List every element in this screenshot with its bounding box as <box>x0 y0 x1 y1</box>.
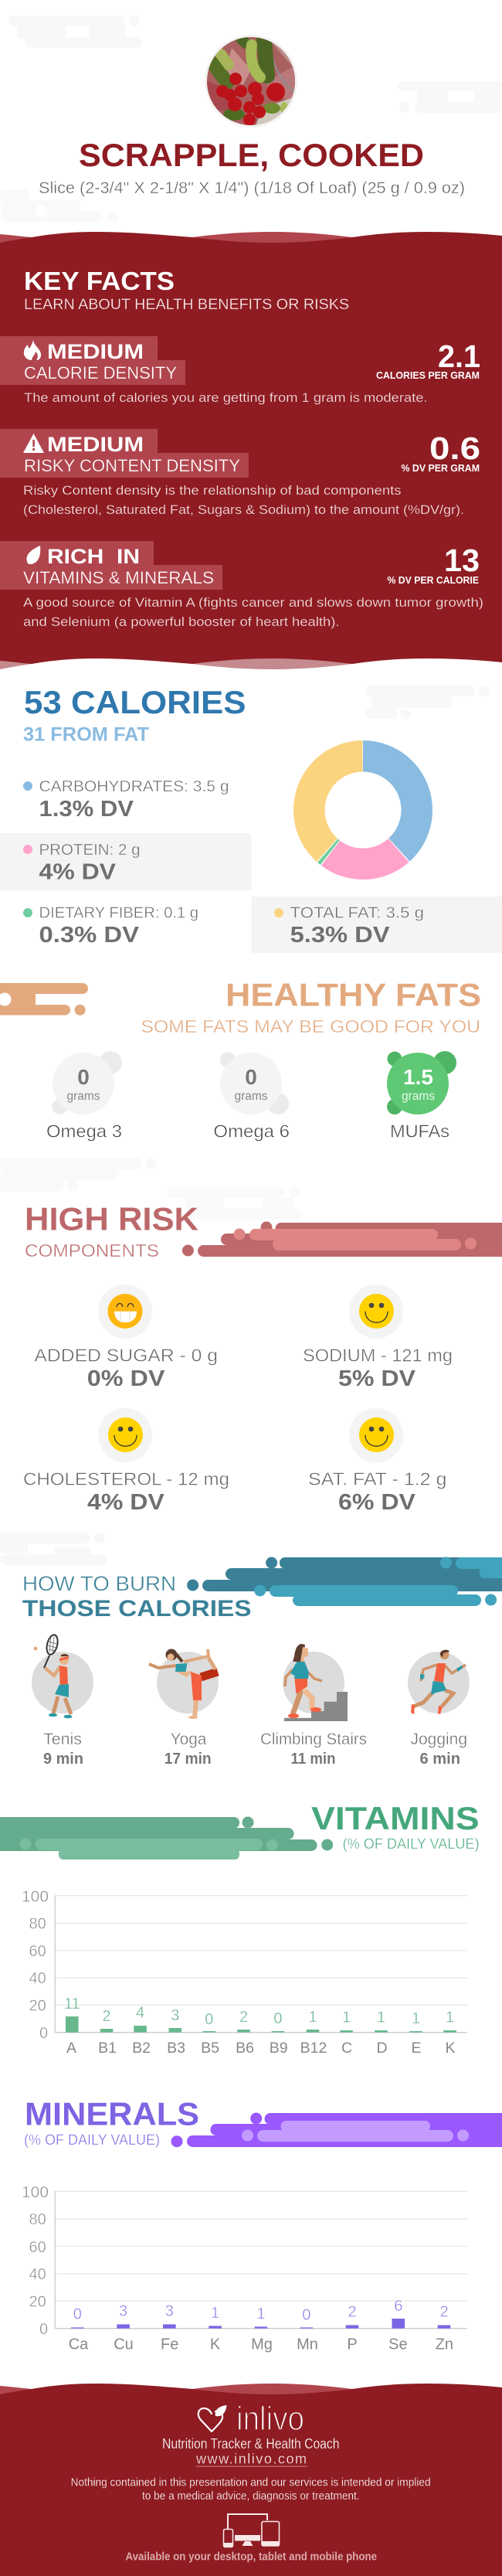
photo: scrapple dish <box>205 35 297 128</box>
activity: climbing stairs: Climbing Stairs <box>260 1730 367 1748</box>
bar chart: vitamins: 3 <box>171 2007 179 2024</box>
bar chart: minerals: 2 <box>348 2304 357 2321</box>
bar chart: minerals: 1 <box>211 2305 219 2322</box>
icon: grinning face <box>108 1294 142 1329</box>
description: A good source of Vitamin A (fights cancer and slows down tumor growth) <box>23 595 483 610</box>
heading line 1: HOW TO BURN <box>22 1572 176 1595</box>
legend: carbohydrates: 1.3% DV <box>39 797 134 822</box>
background blob: above high risk left <box>0 1158 157 1192</box>
bar chart: minerals: Se <box>388 2336 408 2353</box>
omega 6 badge: 0 <box>245 1065 257 1089</box>
bar chart: vitamins: B6 <box>236 2040 254 2057</box>
high risk heading: HIGH RISK <box>25 1201 198 1237</box>
omega 3 badge: grams <box>66 1090 100 1103</box>
icon: devices <box>224 2514 280 2547</box>
legend: dietary fiber: 0.3% DV <box>39 923 140 948</box>
rating: RICH IN <box>47 545 140 568</box>
legend: total fat: 5.3% DV <box>290 923 390 948</box>
description <box>23 595 483 629</box>
background blob: above burn section <box>0 1533 107 1565</box>
risk item: saturated fat <box>308 1408 446 1515</box>
mufas badge: 1.5 <box>403 1065 433 1089</box>
decorative stripe <box>187 1557 502 1606</box>
bar chart: vitamins: B2 <box>132 2040 151 2057</box>
activity: jogging: 6 min <box>420 1751 460 1768</box>
icon: smiling face <box>359 1417 394 1452</box>
rating: MEDIUM <box>47 340 144 363</box>
omega 6 badge <box>213 1052 290 1142</box>
legend: total fat: TOTAL FAT: 3.5 g <box>290 905 424 922</box>
risk item: sodium <box>303 1285 453 1391</box>
bar chart: minerals: 3 <box>119 2303 127 2320</box>
label: VITAMINS & MINERALS <box>23 568 214 587</box>
bar chart: vitamins: B5 <box>201 2040 219 2057</box>
decorative stripe <box>0 983 88 1016</box>
minerals subheading: (% OF DAILY VALUE) <box>24 2132 160 2149</box>
bar chart: vitamins: 1 <box>446 2009 454 2026</box>
components subheading: COMPONENTS <box>25 1240 159 1261</box>
bar chart: vitamins: 2 <box>239 2009 248 2026</box>
risk item: added sugar: 0% DV <box>87 1366 165 1391</box>
label: CALORIE DENSITY <box>24 363 177 383</box>
mufas badge: MUFAs <box>390 1121 449 1142</box>
bar chart: vitamins: 40 <box>29 1970 46 1987</box>
activity: climbing stairs <box>260 1644 367 1768</box>
activity: yoga <box>149 1649 219 1768</box>
activity: tennis <box>32 1634 93 1768</box>
bar chart: vitamins: A <box>66 2040 76 2057</box>
omega 6 badge: Omega 6 <box>213 1121 290 1142</box>
activity: jogging <box>408 1650 470 1768</box>
unit: % DV PER CALORIE <box>388 575 479 586</box>
risk item: sodium: 5% DV <box>338 1366 416 1391</box>
omega 3 badge: 0 <box>77 1065 90 1089</box>
bar chart: minerals: 100 <box>22 2184 49 2201</box>
description: The amount of calories you are getting from 1 gram is moderate. <box>24 390 428 405</box>
omega 3 badge <box>46 1051 122 1142</box>
bar chart: vitamins: B1 <box>98 2040 117 2057</box>
activity: tennis: Tenis <box>43 1730 82 1748</box>
panel: footer <box>0 2384 502 2576</box>
bar chart: minerals: Mg <box>251 2336 273 2353</box>
bar chart: vitamins: 1 <box>342 2009 351 2026</box>
bar chart: minerals: 3 <box>165 2303 174 2320</box>
bar chart: minerals: 6 <box>394 2298 402 2315</box>
bar chart: vitamins: 0 <box>205 2011 213 2028</box>
bar chart: minerals: Ca <box>69 2336 89 2353</box>
bar chart: vitamins: C <box>341 2040 352 2057</box>
bar chart: minerals: 80 <box>29 2211 46 2228</box>
fact: risky content density <box>0 429 480 517</box>
risk item: cholesterol: 4% DV <box>87 1490 165 1515</box>
bar chart: vitamins <box>22 1889 467 2057</box>
availability note: Available on your desktop, tablet and mobile phone <box>125 2550 377 2564</box>
risk item: saturated fat: SAT. FAT - 1.2 g <box>308 1469 446 1489</box>
rating: MEDIUM <box>47 433 144 456</box>
bar chart: minerals: Cu <box>114 2336 134 2353</box>
calories heading: 53 CALORIES <box>24 684 246 720</box>
bar chart: minerals: 1 <box>256 2305 265 2322</box>
bar chart: vitamins: E <box>411 2040 422 2057</box>
value: 2.1 <box>438 339 480 374</box>
bar chart: vitamins: 0 <box>39 2025 48 2042</box>
bar chart: minerals: 0 <box>302 2307 310 2324</box>
bar chart: minerals: Mn <box>297 2336 318 2353</box>
bar chart: minerals: P <box>347 2336 358 2353</box>
legend: dietary fiber <box>23 905 198 948</box>
description: Risky Content density is the relationship of bad components <box>23 483 402 498</box>
bar chart: vitamins: 2 <box>102 2008 111 2025</box>
icon: smiling face <box>108 1417 143 1452</box>
icon: leaf <box>26 546 40 564</box>
panel: healthy fats <box>0 977 481 1142</box>
healthy fats subheading: SOME FATS MAY BE GOOD FOR YOU <box>141 1016 480 1036</box>
activity: yoga: Yoga <box>171 1730 207 1748</box>
bar chart: vitamins: 1 <box>377 2009 385 2026</box>
label: RISKY CONTENT DENSITY <box>24 456 240 475</box>
legend: total fat <box>252 897 502 953</box>
unit: CALORIES PER GRAM <box>376 370 480 381</box>
tagline: Nutrition Tracker & Health Coach <box>162 2435 340 2452</box>
mufas badge: grams <box>402 1090 435 1103</box>
bar chart: vitamins: 0 <box>273 2010 282 2027</box>
bar chart: vitamins: B12 <box>300 2040 327 2057</box>
bar chart: vitamins: 20 <box>29 1997 46 2014</box>
bar chart: minerals: Fe <box>161 2336 178 2353</box>
bar chart: vitamins: 11 <box>64 1996 80 2013</box>
decorative stripe <box>171 2113 502 2147</box>
bar chart: vitamins: D <box>377 2040 388 2057</box>
background blob: header left <box>8 15 142 48</box>
decorative stripe <box>0 1816 333 1860</box>
fact: vitamins and minerals <box>0 541 483 629</box>
bar chart: vitamins: 80 <box>29 1915 46 1932</box>
description <box>23 483 464 517</box>
activity: climbing stairs: 11 min <box>290 1751 335 1768</box>
healthy fats heading: HEALTHY FATS <box>226 977 481 1013</box>
description: and Selenium (a powerful booster of heart health). <box>23 614 340 629</box>
background blob <box>365 686 490 720</box>
logo wordmark: inlivo <box>236 2400 304 2438</box>
risk item: cholesterol: CHOLESTEROL - 12 mg <box>23 1469 229 1489</box>
bar chart: vitamins: K <box>445 2040 456 2057</box>
title: SCRAPPLE, COOKED <box>79 137 424 173</box>
panel: calories <box>0 684 502 953</box>
bar chart: minerals: 2 <box>439 2304 449 2321</box>
description: (Cholesterol, Saturated Fat, Sugars & Sodium) to the amount (%DV/gr). <box>23 502 464 517</box>
unit: % DV PER GRAM <box>402 463 480 474</box>
legend: dietary fiber: DIETARY FIBER: 0.1 g <box>39 905 198 922</box>
legend: protein: 4% DV <box>39 860 117 885</box>
bar chart: vitamins: 100 <box>22 1889 49 1906</box>
disclaimer: to be a medical advice, diagnosis or treatment. <box>142 2489 360 2503</box>
bar chart: minerals: 40 <box>29 2266 46 2283</box>
background blob: header right <box>397 81 502 113</box>
bar chart: minerals: 20 <box>29 2294 46 2311</box>
bar chart: vitamins: 60 <box>29 1943 46 1960</box>
bar chart: vitamins: 1 <box>412 2010 420 2027</box>
icon: person on stairs <box>284 1644 348 1721</box>
panel: key facts <box>0 232 502 674</box>
omega 6 badge: grams <box>234 1090 268 1103</box>
logo: heart and leaf <box>198 2405 227 2431</box>
vitamins subheading: (% OF DAILY VALUE) <box>343 1836 480 1853</box>
key facts heading: KEY FACTS <box>24 267 175 295</box>
panel: minerals <box>22 2095 502 2353</box>
decorative stripe <box>182 1221 502 1257</box>
bar chart: vitamins: 4 <box>136 2005 144 2022</box>
disclaimer <box>71 2476 431 2503</box>
icon: jogger <box>411 1650 466 1714</box>
bar chart: minerals: Zn <box>436 2336 453 2353</box>
bar chart: vitamins: B3 <box>167 2040 185 2057</box>
legend: carbohydrates: CARBOHYDRATES: 3.5 g <box>39 778 229 795</box>
icon: warning triangle <box>23 434 44 453</box>
risk item: saturated fat: 6% DV <box>338 1490 416 1515</box>
value: 13 <box>444 543 480 578</box>
fact: calorie density <box>0 336 480 405</box>
panel: high risk components <box>23 1201 502 1515</box>
bar chart: minerals: 0 <box>39 2321 48 2338</box>
icon: yoga pose <box>149 1649 218 1719</box>
value: 0.6 <box>429 430 480 466</box>
icon: smiling face <box>359 1294 394 1329</box>
legend: carbohydrates <box>23 778 229 822</box>
key facts subheading: LEARN ABOUT HEALTH BENEFITS OR RISKS <box>24 296 349 313</box>
risk item: added sugar <box>34 1285 218 1391</box>
donut chart <box>287 734 439 886</box>
risk item: sodium: SODIUM - 121 mg <box>303 1346 453 1366</box>
bar chart: vitamins: 1 <box>308 2009 317 2026</box>
legend: protein: PROTEIN: 2 g <box>39 842 141 859</box>
risk item: cholesterol <box>23 1408 229 1515</box>
bar chart: vitamins: B9 <box>270 2040 288 2057</box>
bar chart: minerals: K <box>210 2336 221 2353</box>
panel: how to burn calories <box>22 1557 502 1768</box>
vitamins heading: VITAMINS <box>311 1800 480 1836</box>
bar chart: minerals <box>22 2184 467 2353</box>
website url: www.inlivo.com <box>195 2452 307 2467</box>
icon: flame <box>24 340 41 360</box>
subtitle: serving size: Slice (2-3/4" X 2-1/8" X 1/4") (1/18 Of Loaf) (25 g / 0.9 oz) <box>39 179 465 197</box>
activity: yoga: 17 min <box>165 1751 212 1768</box>
background blob: header lower left <box>0 189 118 223</box>
mufas badge <box>387 1051 456 1142</box>
icon: tennis player <box>34 1634 73 1718</box>
minerals heading: MINERALS <box>25 2095 199 2132</box>
activity: tennis: 9 min <box>43 1751 83 1768</box>
bar chart: minerals: 0 <box>73 2306 82 2323</box>
disclaimer: Nothing contained in this presentation and our services is intended or implied <box>71 2476 431 2489</box>
risk item: added sugar: ADDED SUGAR - 0 g <box>34 1346 218 1366</box>
panel: vitamins <box>0 1800 480 2057</box>
legend: protein <box>0 833 252 890</box>
heading line 2: THOSE CALORIES <box>22 1596 252 1621</box>
calories from fat: 31 FROM FAT <box>23 724 149 746</box>
omega 3 badge: Omega 3 <box>46 1121 122 1142</box>
background blob: above high risk right <box>167 1187 301 1220</box>
bar chart: minerals: 60 <box>29 2239 46 2256</box>
activity: jogging: Jogging <box>411 1730 467 1748</box>
